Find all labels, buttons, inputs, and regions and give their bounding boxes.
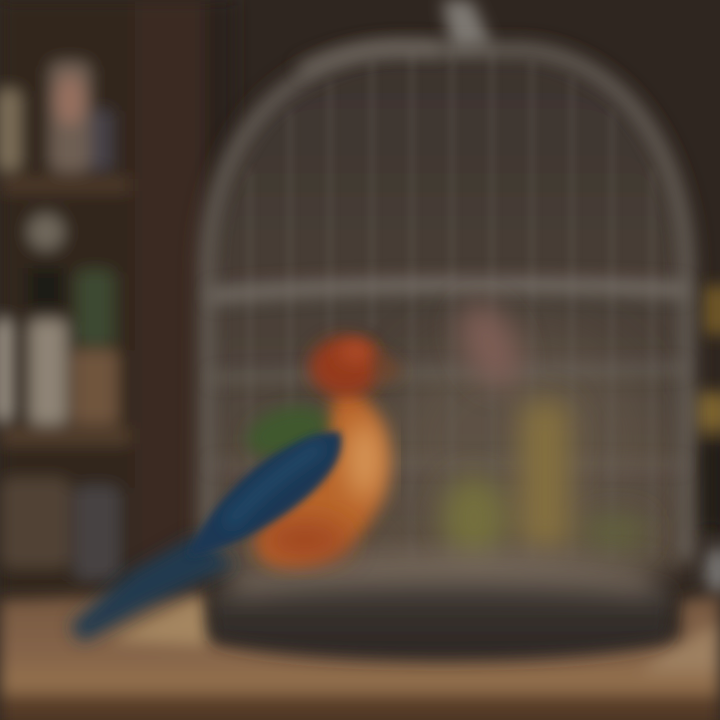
panel: shelves on the left: [0, 0, 235, 610]
cage horizontal hoops: [210, 46, 686, 465]
cage interior glow: [390, 330, 650, 550]
body: [257, 385, 388, 566]
cage base tray: [210, 554, 672, 661]
right side warm objects: [692, 285, 720, 594]
cage interior: [205, 50, 688, 570]
cage outer frame: [208, 50, 686, 560]
cage vertical bars: [250, 50, 652, 560]
beak: [376, 350, 406, 384]
cage: [205, 0, 688, 570]
cage hook: [442, 0, 492, 50]
table surface: [0, 592, 720, 720]
green back: [241, 398, 335, 466]
blue wing: [188, 432, 341, 556]
tail: [70, 535, 235, 642]
perch and toys inside the cage: [442, 294, 645, 560]
bird: [70, 337, 406, 642]
head: [309, 337, 381, 397]
